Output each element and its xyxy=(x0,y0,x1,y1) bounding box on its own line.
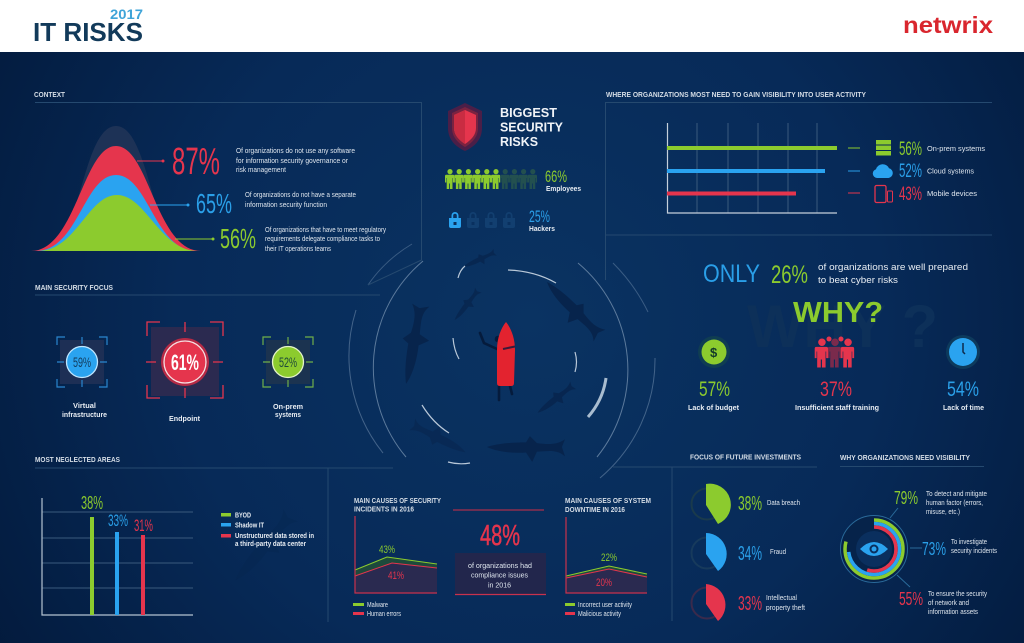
panel: main security focus xyxy=(35,285,313,423)
panel: compliance issues 48%: in 2016 xyxy=(488,580,511,590)
item: intellectual property theft xyxy=(692,584,805,621)
panel: where organizations need visibility xyxy=(606,92,985,213)
stat: hackers 25% xyxy=(529,207,555,233)
area chart: security incidents: 43% xyxy=(379,544,395,556)
legend: neglected areas: BYOD xyxy=(235,510,251,520)
statement: only 26%: 26% xyxy=(771,261,808,289)
callout: 56% xyxy=(175,223,386,254)
legend: security incidents: Human errors xyxy=(367,609,401,618)
legend: security incidents: Malware xyxy=(367,600,388,609)
statement: only 26%: of organizations are well prepared xyxy=(818,262,968,273)
callout: 56%: 56% xyxy=(220,223,256,254)
legend: neglected areas: Shadow IT xyxy=(235,520,264,530)
heading: biggest security risks: RISKS xyxy=(500,134,538,149)
legend: security incidents xyxy=(353,600,401,618)
item: data breach xyxy=(692,484,800,524)
stat: employees 66% xyxy=(545,167,581,193)
callout: 65%: 65% xyxy=(196,188,232,219)
item: fraud: Fraud xyxy=(770,547,786,556)
callout: 73%: 73% xyxy=(922,539,946,559)
stat: cloud: Cloud systems xyxy=(927,166,974,176)
legend: system downtime: Incorrect user activity xyxy=(578,600,632,609)
chart: bell curves xyxy=(31,126,201,251)
icon row: hackers xyxy=(449,212,515,228)
bar chart: neglected areas xyxy=(42,493,193,615)
area chart: security incidents: 41% xyxy=(388,570,404,582)
callout: 87%: Of organizations do not use any software xyxy=(236,146,355,155)
stat: on-prem: On-prem systems xyxy=(927,144,985,153)
icon: cloud xyxy=(873,164,893,178)
panel: main causes of security incidents xyxy=(353,498,441,618)
stat: on-prem xyxy=(899,139,985,160)
label: virtual infrastructure xyxy=(62,401,107,419)
heading: biggest security risks: SECURITY xyxy=(500,120,563,134)
callout: 55%: 55% xyxy=(899,589,923,609)
reason: lack of budget: 57% xyxy=(699,378,730,401)
stat: mobile xyxy=(899,184,977,205)
statement: only 26%: ONLY xyxy=(703,260,760,288)
callout: 73%: To investigate xyxy=(951,537,987,546)
heading: security incidents: MAIN CAUSES OF SECURITY xyxy=(354,498,441,505)
statement: only 26%: to beat cyber risks xyxy=(818,275,898,286)
icon: on-prem 52%: 52% xyxy=(279,354,297,370)
reason: lack of time: 54% xyxy=(947,378,979,401)
icon: server xyxy=(876,140,891,156)
stat: employees 66%: 66% xyxy=(545,167,567,186)
item: intellectual property theft: 33% xyxy=(738,593,762,615)
stat: cloud xyxy=(899,161,974,182)
icon: virtual infrastructure 59% xyxy=(57,337,107,387)
panel: compliance issues 48%: of organizations had xyxy=(468,561,532,570)
item: fraud xyxy=(692,533,786,571)
ghost word: WHY ? xyxy=(747,293,938,360)
callout: 55%: information assets xyxy=(928,607,978,616)
legend: system downtime xyxy=(565,600,632,618)
stat: mobile: Mobile devices xyxy=(927,189,977,198)
callout: 65%: information security function xyxy=(245,200,327,209)
stat: mobile: 43% xyxy=(899,184,922,205)
item: data breach: 38% xyxy=(738,493,762,515)
callout: 79%: 79% xyxy=(894,488,918,508)
bar chart: neglected areas: 31% xyxy=(134,516,153,535)
callout: 55%: of network and xyxy=(928,598,969,607)
heading: biggest security risks xyxy=(500,105,563,149)
area chart: system downtime: 20% xyxy=(596,577,612,589)
callout: 87%: risk management xyxy=(236,165,286,174)
heading: visibility: WHERE ORGANIZATIONS MOST NEED TO GAIN VISIBILITY INTO USER ACTIVITY xyxy=(606,92,866,99)
callout: 65% xyxy=(150,188,356,219)
legend: neglected areas xyxy=(221,510,314,548)
callout: 87%: 87% xyxy=(172,141,220,183)
title: IT RISKS xyxy=(33,17,143,47)
heading: security incidents xyxy=(354,498,441,514)
year: 2017 xyxy=(110,6,143,22)
callout: 79%: To detect and mitigate xyxy=(926,489,987,498)
statement: only 26% xyxy=(703,260,968,289)
item: intellectual property theft: property theft xyxy=(766,603,805,612)
heading: security incidents: INCIDENTS IN 2016 xyxy=(354,506,414,514)
reason: lack of time: Lack of time xyxy=(943,403,984,412)
callout: 79%: human factor (errors, xyxy=(926,498,983,507)
bar chart: neglected areas: 38% xyxy=(81,493,103,513)
panel: only 26% prepared, why xyxy=(688,260,984,412)
panel: focus of future investments xyxy=(690,454,805,621)
stat: on-prem: 56% xyxy=(899,139,922,160)
item: fraud: 34% xyxy=(738,543,762,565)
panel: main causes of system downtime xyxy=(565,498,651,618)
icon: on-prem 52% xyxy=(263,337,313,387)
panel frame lines xyxy=(35,102,992,622)
callout: 56%: Of organizations that have to meet regulatory xyxy=(265,225,386,234)
item: intellectual property theft: Intellectual xyxy=(766,593,797,602)
label: on-prem systems: On-prem xyxy=(273,402,303,411)
heading: most neglected areas: MOST NEGLECTED AREAS xyxy=(35,457,120,464)
reason: lack of time xyxy=(943,335,984,412)
reason: insufficient staff training: 37% xyxy=(820,378,852,401)
heading: why: WHY? xyxy=(793,297,883,329)
callout: 56%: requirements delegate compliance tasks to xyxy=(265,234,380,243)
legend: system downtime: Malicious activity xyxy=(578,609,621,618)
heading: biggest security risks: BIGGEST xyxy=(500,105,557,120)
callout: 65%: Of organizations do not have a separate xyxy=(245,190,356,199)
heading: system downtime: DOWNTIME IN 2016 xyxy=(565,507,625,514)
heading: main security focus: MAIN SECURITY FOCUS xyxy=(35,285,113,292)
chart: concentric rings with eye xyxy=(840,516,908,582)
heading: context: CONTEXT xyxy=(34,92,66,99)
icon: eye xyxy=(860,542,888,556)
legend: neglected areas: a third-party data center xyxy=(235,539,306,548)
area chart: system downtime xyxy=(566,517,647,593)
reason: lack of budget: $ xyxy=(710,345,718,360)
label: virtual infrastructure: infrastructure xyxy=(62,410,107,419)
item: data breach: Data breach xyxy=(767,498,800,507)
stat: cloud: 52% xyxy=(899,161,922,182)
stat: hackers 25%: 25% xyxy=(529,207,550,226)
icon: mobile devices xyxy=(875,186,892,202)
reason: insufficient staff training: Insufficient staff training xyxy=(795,403,879,412)
icon row: employees xyxy=(445,169,537,189)
panel: compliance issues 48%: 48% xyxy=(480,520,520,552)
reason: lack of budget xyxy=(688,336,740,412)
logo: netwrix: netwrix xyxy=(903,12,993,38)
heading: need visibility: WHY ORGANIZATIONS NEED VISIBILITY xyxy=(840,455,970,462)
heading: system downtime: MAIN CAUSES OF SYSTEM xyxy=(565,498,651,505)
label: on-prem systems xyxy=(273,402,303,419)
reason: lack of budget: Lack of budget xyxy=(688,403,740,412)
heading: future investments: FOCUS OF FUTURE INVESTMENTS xyxy=(690,454,801,462)
bar chart: neglected areas: 33% xyxy=(108,511,128,530)
callout: 87%: for information security governance or xyxy=(236,156,349,165)
callout: 55%: To ensure the security xyxy=(928,589,987,598)
label: virtual infrastructure: Virtual xyxy=(73,401,96,410)
panel: compliance issues 48%: compliance issues xyxy=(471,570,528,580)
legend: neglected areas: Unstructured data stored in xyxy=(235,531,314,540)
callout: 73% xyxy=(910,537,997,559)
callout: 79% xyxy=(890,488,987,518)
swimmer xyxy=(480,333,512,400)
icon: virtual infrastructure 59%: 59% xyxy=(73,354,91,370)
callout: 87% xyxy=(137,141,355,183)
panel: compliance issues 48% xyxy=(453,510,546,594)
panel: context xyxy=(31,92,386,254)
surfboard xyxy=(497,322,515,386)
central illustration: swimmer with surfboard circled by sharks xyxy=(226,244,655,590)
icon: endpoint 61% xyxy=(146,322,223,398)
label: on-prem systems: systems xyxy=(275,410,301,419)
panel: why organizations need visibility xyxy=(840,455,997,616)
label: endpoint: Endpoint xyxy=(169,414,201,423)
panel: biggest security risks xyxy=(445,103,581,233)
area chart: system downtime: 22% xyxy=(601,552,617,564)
panel: most neglected areas xyxy=(35,457,314,615)
header band xyxy=(0,0,1024,52)
icon: endpoint 61%: 61% xyxy=(171,350,199,375)
stat: employees 66%: Employees xyxy=(546,184,581,193)
callout: 79%: misuse, etc.) xyxy=(926,507,960,516)
reason: insufficient staff training xyxy=(795,336,879,412)
icon: shield xyxy=(448,103,482,151)
stat: hackers 25%: Hackers xyxy=(529,224,555,233)
heading: system downtime xyxy=(565,498,651,514)
callout: 73%: security incidents xyxy=(951,546,997,555)
callout: 55% xyxy=(897,575,987,616)
bar chart: visibility xyxy=(667,123,860,213)
area chart: security incidents xyxy=(355,516,437,593)
callout: 56%: their IT operations teams xyxy=(265,244,331,253)
